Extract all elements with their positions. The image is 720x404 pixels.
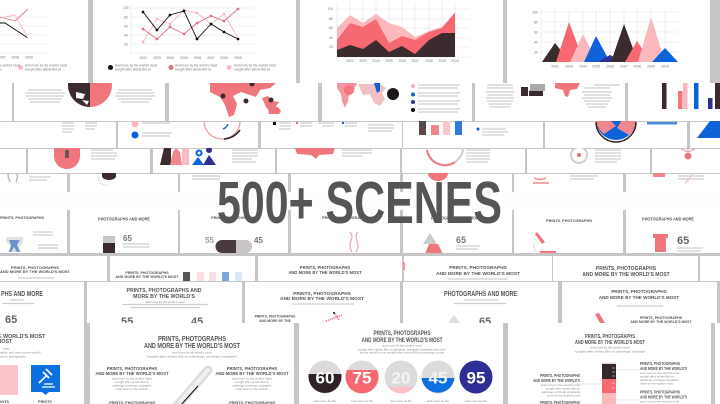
row 6 scene cards: 65 xyxy=(456,235,466,245)
panel: icon squares: PRINTS xyxy=(38,400,52,404)
circle: 75: 75 xyxy=(353,368,371,388)
panel: area chart: 20 xyxy=(329,45,333,49)
panel: tube chart xyxy=(508,323,711,404)
row 8 scene cards: PRINTS, PHOTOGRAPHS xyxy=(611,289,667,294)
circle: 45: 45 xyxy=(429,368,447,388)
row 8 scene cards: PRINTS, PHOTOGRAPHS xyxy=(255,314,296,318)
panel: triangle chart: 100 xyxy=(532,10,538,14)
text block left: paintings, printings cingraphs xyxy=(113,384,152,388)
row 8 scene cards: MORE BY THE WORLD'S xyxy=(133,294,195,300)
row 6 scene cards: 55 xyxy=(205,236,214,245)
heading: AND MORE BY THE WORLD'S MOST xyxy=(362,337,443,344)
text block upper right: more by the world's most xyxy=(640,382,673,386)
panel: area chart: 2010 xyxy=(451,59,459,63)
panel: tube chart: and more by the world's most xyxy=(590,346,630,350)
panel: icon squares: ughts, and more by the world's xyxy=(0,350,41,354)
panel: area chart: 2002 xyxy=(346,59,354,63)
panel: triangle chart: 2008 xyxy=(633,64,641,68)
panel: area chart xyxy=(300,0,503,83)
row 8 scene cards: PHS AND MORE xyxy=(1,291,43,298)
row 8 scene cards: PRINTS, PHOTOGRAPHS xyxy=(293,291,352,297)
heading xyxy=(362,330,443,344)
chart: multi-series line: 20 xyxy=(124,42,128,46)
row 8 scene cards: 45 xyxy=(191,316,203,328)
chart: multi-series line: 80 xyxy=(124,16,128,20)
panel: triangle chart: 2006 xyxy=(606,64,614,68)
text block left: sought after artists Bid on xyxy=(546,386,580,390)
panel: icon squares: most xyxy=(3,346,10,350)
row 7 scene cards: AND MORE BY THE WORLD'S MOST xyxy=(436,271,520,277)
panel: triangle chart: 2002 xyxy=(551,64,559,68)
heading: PRINTS, PHOTOGRAPHS xyxy=(374,330,430,337)
panel: area chart: 2008 xyxy=(425,59,433,63)
text block lower right: AND MORE BY THE WORLD'S xyxy=(640,394,687,400)
text block upper right: AND MORE BY THE WORLD'S xyxy=(640,366,687,371)
panel: line chart left partial xyxy=(0,0,88,83)
row 7 scene cards: AND MORE BY THE WORLD'S MOST xyxy=(0,269,71,274)
heading: AND MORE BY THE WORLD'S MOST xyxy=(575,340,646,346)
row 8 scene cards: AND MORE BY THE WORLD'S MOST xyxy=(280,296,364,302)
circle: 75 xyxy=(346,360,378,394)
chart: multi-series line: 2003 xyxy=(153,56,161,60)
row 6 scene cards: PRINTS, PHOTOGRAPHS xyxy=(211,216,257,220)
row 6 scene cards: 65 xyxy=(677,235,689,247)
row 8 scene cards: AND MORE BY THE xyxy=(259,319,292,323)
text block left: PRINTS, PHOTOGRAPHS xyxy=(107,366,157,371)
row 5 scene cards xyxy=(0,173,720,210)
row 8 scene cards: 65 xyxy=(479,316,491,328)
text block upper right xyxy=(640,361,687,386)
chart: stacked tube xyxy=(577,362,640,404)
chart: multi-series line: 2007 xyxy=(207,56,215,60)
text block right: AND MORE BY THE WORLD'S MOST xyxy=(215,371,289,376)
text block left: AND MORE BY THE WORLD'S xyxy=(533,378,580,383)
title: 500+ SCENES xyxy=(217,170,502,236)
panel: percentage circles: and more by the world's most xyxy=(382,344,422,348)
row 6 scene cards: PRINTS, PHOTOGRAPHS xyxy=(546,219,592,223)
row 8 scene cards: AND MORE BY THE WORLD'S MOST xyxy=(630,320,692,324)
top row chart cards xyxy=(0,0,710,83)
panel: thermometer scene xyxy=(90,323,294,404)
row 6 scene cards: PRINTS, PHOTOGRAPHS xyxy=(322,216,368,220)
text block upper right: and more by the world's most xyxy=(640,371,679,375)
row 6 scene cards xyxy=(0,210,720,254)
panel: triangle chart: 20 xyxy=(534,50,538,54)
panel: line chart left partial: 2009 xyxy=(25,56,33,60)
panel: line chart xyxy=(93,0,296,83)
chart: multi-series line: 40 xyxy=(124,34,128,38)
panel: percentage circles: And more by the xyxy=(465,399,487,403)
heading xyxy=(575,334,646,346)
row 2 scene cards xyxy=(0,83,720,121)
text block right: and more by the world's most xyxy=(232,376,272,380)
text block right: PRINTS, PHOTOGRAPHS xyxy=(227,366,277,371)
panel: icon squares: prints, photographs. xyxy=(0,354,27,358)
text block left: and more by the world's xyxy=(116,387,148,391)
panel: area chart: 2003 xyxy=(359,59,367,63)
text block right xyxy=(215,366,289,391)
panel: tube chart: sought after artists Bid on paintings, printegh xyxy=(575,350,645,354)
row 7 scene cards: AND MORE BY THE WORLD'S MOST xyxy=(116,275,179,279)
text block lower right: PRINTS, PHOTOGRAPHS xyxy=(640,390,680,394)
row 7 scene cards: PRINTS, PHOTOGRAPHS xyxy=(449,265,508,271)
panel: triangle chart xyxy=(507,0,710,83)
text block left: and more by the world's most xyxy=(541,383,580,387)
text block right: sought after artists Bid on xyxy=(235,380,269,384)
row 6 scene cards: PHOTOGRAPHS AND MORE xyxy=(642,216,694,222)
text block lower right xyxy=(640,390,687,404)
panel: area chart: 80 xyxy=(329,17,333,21)
chart: multi-series line: 100 xyxy=(123,6,129,10)
circle: 95 xyxy=(460,360,492,394)
legend: And more by the world's most xyxy=(175,64,217,68)
chart: multi-series line: 60 xyxy=(124,24,128,28)
row 7 scene cards: PRINTS, PHOTOGRAPHS xyxy=(11,265,59,270)
text block right: and more by the world's xyxy=(236,387,268,391)
panel: triangle chart: 40 xyxy=(534,40,538,44)
panel: area chart: 2009 xyxy=(438,59,446,63)
panel: percentage circles: And more by the xyxy=(390,399,412,403)
row 6 scene cards: PHOTOGRAPHS AND MORE xyxy=(431,216,481,220)
panel: area chart: 2004 xyxy=(372,59,380,63)
text block left: paintings, printegh cingraphs xyxy=(542,390,580,394)
panel: area chart: 2005 xyxy=(385,59,393,63)
panel: area chart: 40 xyxy=(329,36,333,40)
circle: 95: 95 xyxy=(467,368,485,388)
row 6 scene cards: PHOTOGRAPHS AND MORE xyxy=(98,216,150,222)
row 8 scene cards xyxy=(0,282,717,323)
circle: 60: 60 xyxy=(316,368,334,388)
text block left: more by the world's most xyxy=(547,394,580,398)
panel: line chart left partial: And more by the world's most xyxy=(25,64,67,68)
chart: multi-series line: 2009 xyxy=(234,56,242,60)
legend xyxy=(108,64,276,72)
text block lower right: and more by the world's most xyxy=(640,400,679,404)
text block upper right: PRINTS, PHOTOGRAPHS xyxy=(640,361,680,366)
panel: triangle chart: 2009 xyxy=(647,64,655,68)
text block upper right: sought after artists Bid on xyxy=(640,374,674,378)
text block right: paintings, printings cingraphs xyxy=(233,384,272,388)
panel: triangle chart: 2007 xyxy=(620,64,628,68)
chart: multi-series line: 2008 xyxy=(220,56,228,60)
panel: triangle chart: 80 xyxy=(534,20,538,24)
row 6 scene cards: 45 xyxy=(254,236,263,245)
icon: thermometer xyxy=(176,370,208,404)
panel: percentage circles xyxy=(299,323,503,404)
chart: multi-series line: 2002 xyxy=(139,56,147,60)
legend: sought after artists Bid on xyxy=(115,68,151,72)
chart: multi-series line: 2004 xyxy=(166,56,174,60)
circle: 20 xyxy=(384,360,418,394)
heading: AND MORE BY THE WORLD'S MOST xyxy=(144,341,240,350)
panel: triangle chart: 60 xyxy=(534,30,538,34)
text block left xyxy=(95,366,169,391)
panel: percentage circles: And more by the xyxy=(351,399,373,403)
row 6 scene cards: 65 xyxy=(123,234,132,243)
heading: PRINTS, PHOTOGRAPHS xyxy=(585,334,635,340)
text block upper right: paintings, printegh cingraphs xyxy=(640,378,679,382)
panel: percentage circles: by the world's most sought after artists Bid on paintings, prints xyxy=(360,350,445,354)
row 7 scene cards: AND MORE BY THE WORLD'S MOST xyxy=(288,270,362,275)
row 8 scene cards: 55 xyxy=(121,316,133,328)
panel: area chart: 100 xyxy=(327,7,333,11)
panel: triangle chart: 2003 xyxy=(565,64,573,68)
panel: percentage circles: And more by the xyxy=(314,399,336,403)
panel: percentage circles: And more by the xyxy=(427,399,449,403)
row 8 scene cards: AND MORE BY THE WORLD'S MOST xyxy=(599,295,679,300)
circle: 20: 20 xyxy=(392,368,410,388)
row 8 scene cards: 65 xyxy=(5,314,17,326)
icon: gavel on blue square xyxy=(31,365,60,395)
panel: area chart: 2006 xyxy=(398,59,406,63)
panel: triangle chart: 2005 xyxy=(592,64,600,68)
panel: triangle chart: 2004 xyxy=(579,64,587,68)
panel: line chart left partial: sought after artists Bid on xyxy=(25,68,61,72)
row 4 scene cards xyxy=(0,147,720,173)
text block left: PRINTS, PHOTOGRAPHS xyxy=(540,373,580,378)
row 6 scene cards: PRINTS, PHOTOGRAPHS xyxy=(0,216,44,220)
row 8 scene cards: PHOTOGRAPHS AND MORE xyxy=(444,291,517,298)
chart: multi-series line: 2006 xyxy=(194,56,201,60)
row 8 scene cards: PRINTS, PHOTOGRAPHS xyxy=(640,316,683,320)
panel: line chart left partial: 2008 xyxy=(11,56,19,60)
panel: percentage circles: sought after artists Bid on paintings, printings cingraphs and more xyxy=(358,348,446,352)
panel: thermometer scene: and more by the world's most xyxy=(172,350,212,354)
heading: PRINTS, PHOTOGRAPHS xyxy=(158,334,226,343)
legend: sought after artists Bid on xyxy=(234,68,270,72)
circle: 60 xyxy=(308,360,342,394)
row 7 scene cards: PRINTS, PHOTOGRAPHS xyxy=(125,271,169,275)
row 7 scene cards: PRINTS, PHOTOGRAPHS xyxy=(596,266,657,272)
circle: 45 xyxy=(422,360,454,394)
bottom row scene cards xyxy=(0,323,720,404)
text block left: AND MORE BY THE WORLD'S MOST xyxy=(95,371,169,376)
chart: multi-series line: 2005 xyxy=(180,56,188,60)
legend: And more by the world's most xyxy=(234,64,276,68)
legend: And more by the world's most xyxy=(115,64,157,68)
heading xyxy=(144,334,240,350)
row 3 scene cards xyxy=(0,121,720,148)
panel: thermometer scene: sought after artists Bid on paintings, printings cingraphs xyxy=(147,354,238,358)
text block left xyxy=(533,373,580,404)
panel: icon squares xyxy=(0,323,84,404)
row 7 scene cards: PRINTS, PHOTOGRAPHS xyxy=(300,265,350,270)
panel: triangle chart: 2010 xyxy=(661,64,669,68)
row 7 scene cards xyxy=(0,256,720,281)
text block left: and more by the world's most xyxy=(112,376,152,380)
text block left: sought after artists Bid on xyxy=(115,380,149,384)
row 8 scene cards: PRINTS, PHOTOGRAPHS AND xyxy=(127,288,202,294)
panel: area chart: 60 xyxy=(329,26,333,30)
row 8 scene cards: and more by the world's most xyxy=(145,300,185,304)
legend: sought after artists Bid on xyxy=(175,68,211,72)
row 7 scene cards: AND MORE BY THE WORLD'S MOST xyxy=(582,272,670,278)
chart: multi-series line xyxy=(123,4,258,60)
panel: area chart: 2007 xyxy=(411,59,419,63)
